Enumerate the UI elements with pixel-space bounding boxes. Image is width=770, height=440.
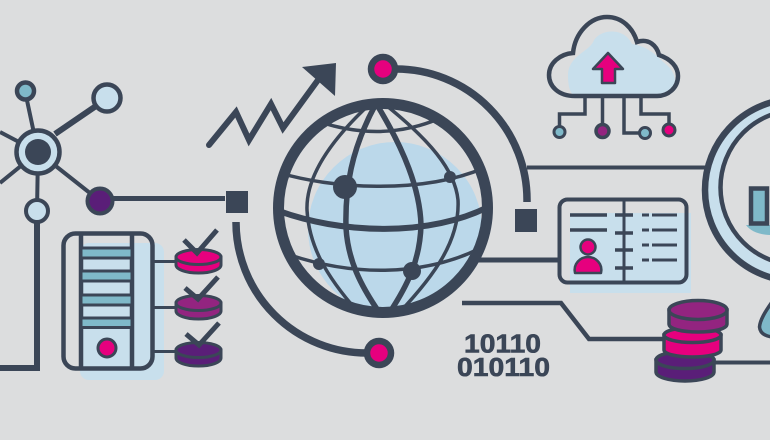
magnifier content: teal bar	[746, 188, 770, 235]
upper orbit arc with magenta node	[371, 57, 537, 232]
network hub with spokes	[0, 82, 120, 368]
line to magnifier	[527, 166, 706, 170]
binary text: 10110	[464, 328, 541, 358]
person icon	[575, 240, 601, 273]
connector from hub to square node	[112, 191, 248, 213]
binary text	[457, 328, 550, 382]
magnifier handle drop	[760, 302, 770, 337]
status disks with check marks	[154, 230, 221, 366]
growth arrow	[209, 63, 336, 145]
server tower	[64, 233, 164, 380]
coin stack	[656, 300, 770, 381]
globe	[276, 100, 492, 316]
circuit line to coins	[462, 303, 664, 339]
magnifier	[705, 99, 770, 337]
cloud upload icon	[549, 17, 678, 138]
ID card	[478, 199, 691, 293]
binary text: 010110	[457, 352, 550, 382]
lower orbit arc with magenta node	[236, 222, 391, 365]
